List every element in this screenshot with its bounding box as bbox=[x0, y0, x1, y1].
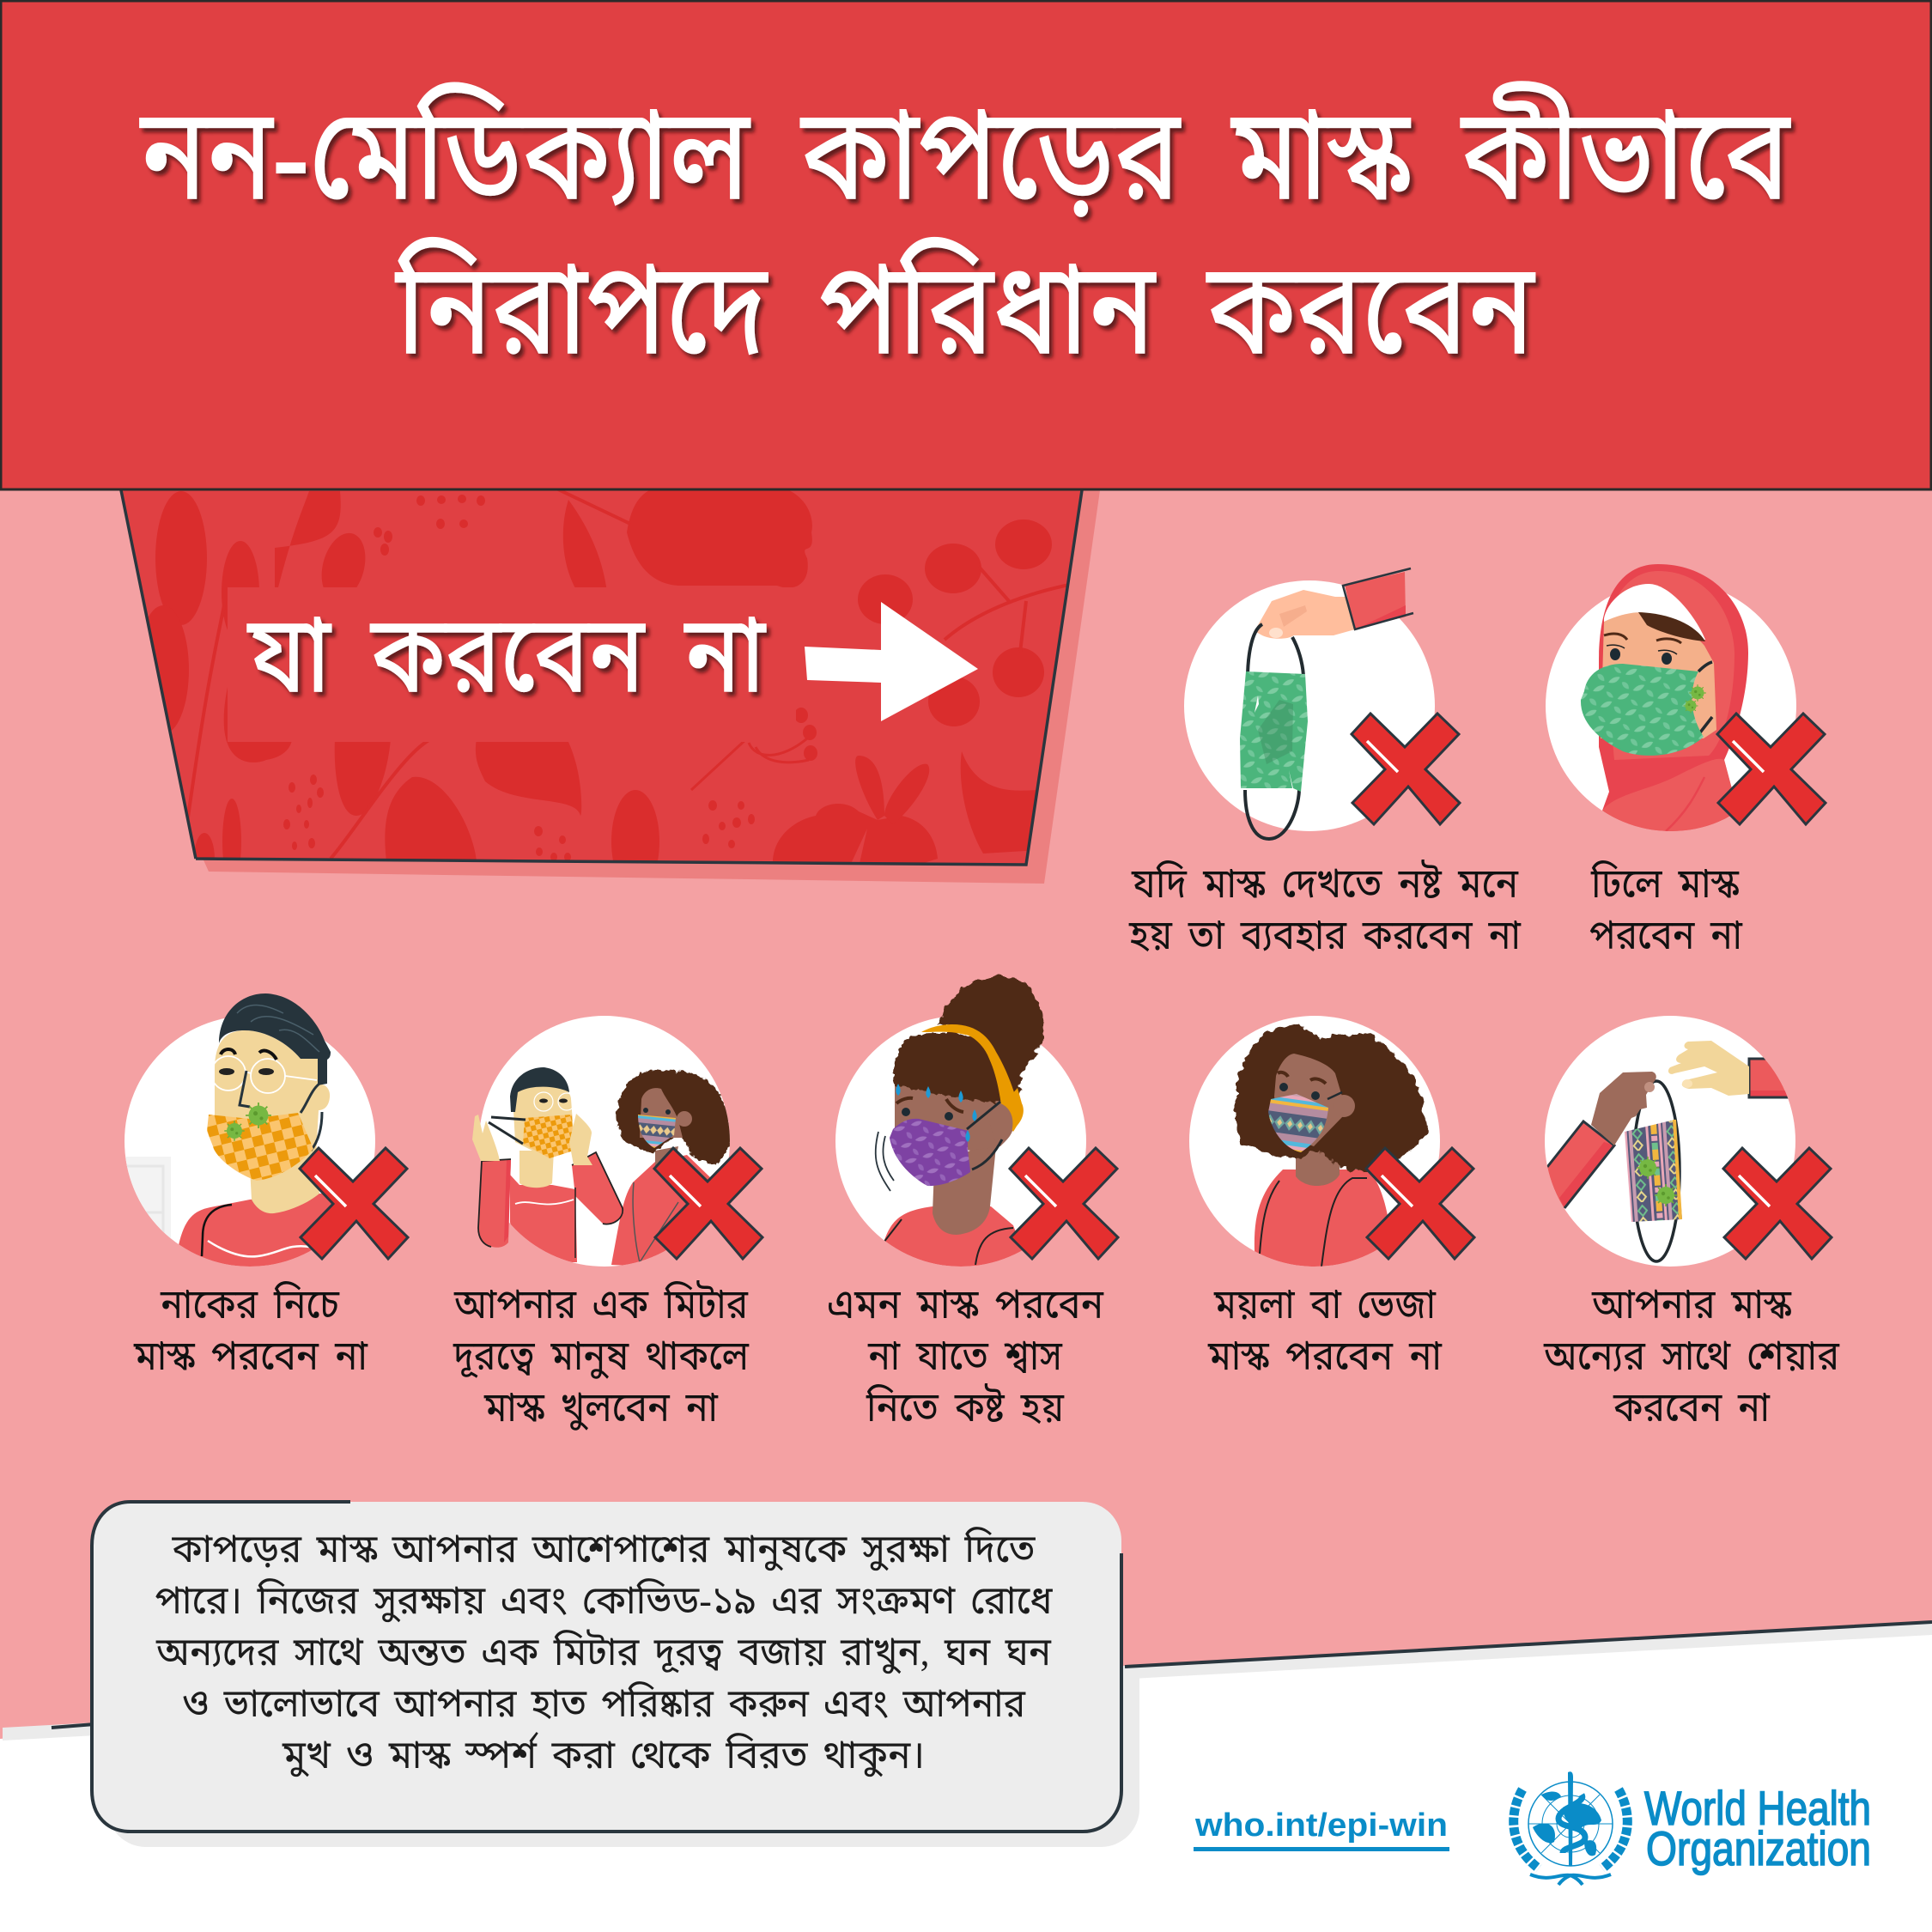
breath lines bbox=[876, 1132, 894, 1191]
neck bbox=[933, 1147, 996, 1235]
illustration: mask makes breathing hard bbox=[835, 975, 1086, 1271]
man's torso bbox=[510, 1175, 577, 1262]
green mask bbox=[1581, 664, 1704, 756]
X marks bbox=[300, 714, 1832, 1259]
illustration: do not share masks bbox=[1537, 1016, 1799, 1267]
man's neck and head bbox=[519, 1151, 554, 1188]
caption: one metre: মাস্ক খুলবেন না bbox=[483, 1385, 719, 1431]
link: who.int/epi-win: who.int/epi-win bbox=[1194, 1807, 1448, 1844]
caption: sharing bbox=[1543, 1282, 1840, 1431]
caption: damaged mask bbox=[1128, 860, 1522, 958]
face bbox=[895, 1082, 1014, 1151]
title bbox=[139, 82, 1790, 381]
hair bbox=[1638, 612, 1705, 641]
WHO wordmark: World Health bbox=[1644, 1781, 1871, 1835]
shirt bbox=[884, 1206, 1022, 1267]
sleeve bbox=[1345, 572, 1406, 629]
brown hand bbox=[1591, 1072, 1656, 1145]
patterned mask bbox=[1625, 1120, 1682, 1222]
box shadow bbox=[107, 1528, 1139, 1847]
WHO wordmark bbox=[1644, 1781, 1871, 1875]
sweat drops bbox=[896, 1084, 977, 1142]
caption: loose mask: ঢিলে মাস্ক bbox=[1590, 860, 1740, 907]
info text: ও ভালোভাবে আপনার হাত পরিষ্কার করুন এবং আপনার bbox=[182, 1680, 1026, 1725]
shirt bbox=[179, 1194, 331, 1267]
info text: অন্যদের সাথে অন্তত এক মিটার দূরত্ব বজায় রাখুন, ঘন ঘন bbox=[155, 1628, 1052, 1674]
caption: sharing: করবেন না bbox=[1613, 1385, 1771, 1431]
info text: মুখ ও মাস্ক স্পর্শ করা থেকে বিরত থাকুন। bbox=[282, 1731, 925, 1777]
caption: one metre bbox=[453, 1280, 750, 1431]
caption: sharing: আপনার মাস্ক bbox=[1591, 1282, 1792, 1327]
white bottom area bbox=[0, 1621, 1932, 1932]
left sleeve bbox=[1537, 1121, 1614, 1219]
mask loop bbox=[1245, 624, 1303, 839]
hair bbox=[1236, 1024, 1426, 1174]
eyes and brows bbox=[219, 1068, 274, 1075]
title: নিরাপদে পরিধান করবেন bbox=[395, 238, 1535, 381]
caption: breathing: না যাতে শ্বাস bbox=[867, 1334, 1063, 1379]
neck bbox=[251, 1153, 319, 1214]
ear strap bbox=[301, 1084, 322, 1151]
eyes bbox=[1610, 648, 1672, 665]
bun bbox=[939, 975, 1043, 1108]
caption: below nose: নাকের নিচে bbox=[160, 1280, 340, 1327]
headband underside bbox=[1013, 1088, 1024, 1127]
caption: dirty or wet bbox=[1207, 1282, 1443, 1379]
panel: info box bbox=[92, 1502, 1139, 1847]
WHO wordmark: Organization bbox=[1646, 1821, 1871, 1875]
shirt bbox=[1255, 1170, 1391, 1271]
illustration: mask under nose bbox=[125, 993, 378, 1271]
WHO emblem bbox=[1514, 1771, 1627, 1885]
ear bbox=[1001, 1103, 1013, 1130]
illustration: damaged mask bbox=[1184, 568, 1435, 839]
woman bbox=[611, 1155, 710, 1266]
caption: below nose: মাস্ক পরবেন না bbox=[133, 1334, 368, 1379]
caption: one metre: আপনার এক মিটার bbox=[453, 1280, 749, 1327]
hand bbox=[1255, 590, 1355, 639]
door bbox=[125, 1157, 171, 1245]
caption: dirty or wet: মাস্ক পরবেন না bbox=[1207, 1334, 1443, 1379]
caption: below nose bbox=[133, 1280, 368, 1379]
caption: damaged mask: যদি মাস্ক দেখতে নষ্ট মনে bbox=[1131, 860, 1519, 907]
banner heading: যা করবেন না bbox=[246, 597, 767, 715]
arrow bbox=[805, 602, 978, 721]
info text: পারে। নিজের সুরক্ষায় এবং কোভিড-১৯ এর সংক্রমণ রোধে bbox=[155, 1577, 1053, 1623]
neck bbox=[1296, 1125, 1340, 1186]
elastic loop bbox=[1633, 1081, 1680, 1261]
caption: loose mask: পরবেন না bbox=[1589, 913, 1743, 958]
straps bbox=[489, 1117, 526, 1144]
face bbox=[1274, 1054, 1343, 1146]
illustration: keep mask on near people bbox=[472, 1016, 731, 1271]
glasses bbox=[211, 1056, 317, 1093]
info text bbox=[155, 1525, 1053, 1777]
illustration: loose mask bbox=[1546, 564, 1796, 831]
face bbox=[1601, 612, 1716, 738]
caption: sharing: অন্যের সাথে শেয়ার bbox=[1543, 1334, 1840, 1379]
white cap bbox=[1604, 584, 1705, 640]
caption: damaged mask: হয় তা ব্যবহার করবেন না bbox=[1128, 913, 1522, 958]
eyes bbox=[902, 1108, 953, 1121]
face bbox=[215, 1030, 330, 1155]
man's hand bbox=[472, 1115, 500, 1161]
caption: breathing: এমন মাস্ক পরবেন bbox=[827, 1282, 1104, 1327]
right sleeve bbox=[1749, 1059, 1799, 1099]
tribal mask bbox=[1268, 1094, 1328, 1152]
hijab bbox=[1599, 564, 1748, 831]
caption: loose mask bbox=[1589, 860, 1743, 958]
caption: breathing: নিতে কষ্ট হয় bbox=[866, 1383, 1065, 1431]
illustration: dirty or wet mask bbox=[1189, 1016, 1440, 1271]
strap bbox=[1698, 662, 1712, 732]
straps bbox=[967, 1102, 1002, 1170]
torn green mask bbox=[1240, 671, 1308, 792]
strap bbox=[1327, 1092, 1342, 1099]
header band bbox=[1, 1, 1931, 489]
panel: what not to do banner bbox=[121, 485, 1100, 893]
info text: কাপড়ের মাস্ক আপনার আশেপাশের মানুষকে সুরক্ষা দিতে bbox=[172, 1525, 1036, 1571]
man's left arm bbox=[478, 1159, 511, 1248]
banner shadow bbox=[201, 490, 1100, 884]
caption: breathing bbox=[827, 1282, 1104, 1431]
pale hand bbox=[1668, 1041, 1749, 1096]
front hair bbox=[893, 1032, 996, 1103]
hair bbox=[219, 993, 331, 1085]
small orange mask bbox=[523, 1115, 574, 1158]
inner text plate bbox=[228, 587, 796, 742]
caption: one metre: দূরত্বে মানুষ থাকলে bbox=[453, 1334, 750, 1379]
captions bbox=[133, 860, 1840, 1431]
purple mask bbox=[890, 1119, 970, 1186]
caption: dirty or wet: ময়লা বা ভেজা bbox=[1213, 1282, 1437, 1327]
orange checked mask bbox=[207, 1113, 313, 1181]
headband bbox=[921, 1024, 1020, 1132]
